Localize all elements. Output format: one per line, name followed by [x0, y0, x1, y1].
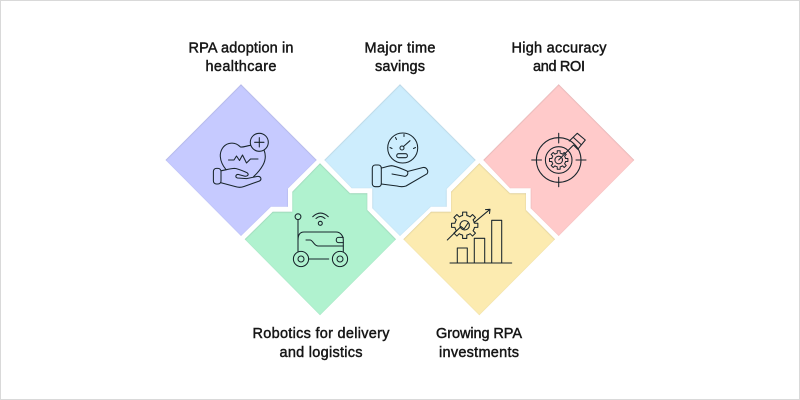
- heading: RPA adoption in healthcare: [188, 40, 294, 75]
- heading: Growing RPA investments: investments: [439, 345, 519, 361]
- heading: Growing RPA investments: Growing RPA: [436, 326, 522, 342]
- diamond: green: [245, 163, 396, 315]
- heading: High accuracy and ROI: and ROI: [533, 59, 585, 75]
- panel: RPA adoption in healthcare: [166, 84, 317, 236]
- diamond: purple: [166, 84, 317, 236]
- panel: Major time savings: [324, 84, 476, 236]
- panel: Robotics for delivery and logistics: [245, 163, 396, 315]
- heading: Major time savings: savings: [375, 59, 425, 75]
- icon: target with arrow: [532, 133, 586, 187]
- heading: Major time savings: Major time: [364, 40, 436, 56]
- icon: gauge over hand: [372, 133, 428, 187]
- heading: High accuracy and ROI: [512, 40, 607, 75]
- heading: High accuracy and ROI: High accuracy: [512, 40, 607, 56]
- heading: Robotics for delivery and logistics: and logistics: [280, 345, 362, 361]
- heading: Major time savings: [364, 40, 436, 75]
- diamond: red: [483, 84, 634, 236]
- heading: Robotics for delivery and logistics: Robotics for delivery: [252, 326, 390, 342]
- icon: heart in hand: [213, 133, 268, 187]
- diamond: blue: [324, 84, 476, 236]
- panel: Growing RPA investments: [403, 163, 555, 315]
- heading: Robotics for delivery and logistics: [252, 326, 390, 361]
- heading: RPA adoption in healthcare: RPA adoption in: [188, 40, 294, 56]
- icon: delivery robot: [293, 213, 348, 267]
- panel: High accuracy and ROI: [483, 84, 634, 236]
- heading: RPA adoption in healthcare: healthcare: [206, 59, 276, 75]
- icon: bar chart with gear and arrow: [447, 209, 512, 263]
- heading: Growing RPA investments: [436, 326, 522, 361]
- diamond: yellow: [403, 163, 555, 315]
